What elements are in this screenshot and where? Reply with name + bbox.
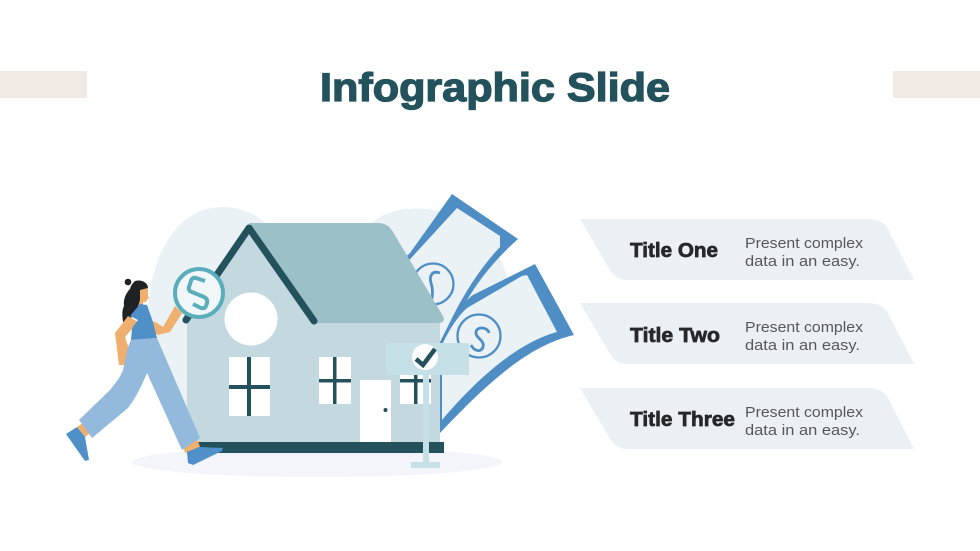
dollar coin [175,269,223,317]
shirt [130,304,157,340]
for sale sign [386,343,469,468]
title: Infographic Slide [320,66,670,110]
background blob right [370,209,508,420]
panel: title three [580,388,914,449]
hair [122,279,148,322]
text: description one: Present complex [745,235,864,252]
text: description one: data in an easy. [745,253,860,270]
heading: title three: Title Three [630,409,735,431]
house roof [249,223,444,323]
right window [400,357,431,404]
front arm [150,306,182,335]
trousers [79,338,200,450]
ground shadow [132,447,502,477]
front banknote [440,264,574,433]
illustration: house, person and money [66,194,574,477]
text: description three: data in an easy. [745,422,860,439]
left shoe [66,427,89,461]
attic round window [224,292,278,346]
right accent bar [893,71,980,98]
background blob left [147,207,290,440]
ankles [77,423,200,453]
person [66,279,223,465]
panel: title two [580,303,914,364]
door [360,380,391,442]
roof edge [186,228,314,321]
heading: title one: Title One [630,240,718,262]
right shoe [187,447,223,465]
back banknote [400,194,518,350]
heading: title two: Title Two [630,325,720,347]
middle window [319,357,351,404]
text: description three: Present complex [745,404,864,421]
panel: title one [580,219,914,280]
back arm [115,316,138,365]
left accent bar [0,71,87,98]
left window [229,357,270,416]
house body [187,232,440,442]
text: description two: data in an easy. [745,337,860,354]
head and neck [138,288,149,307]
house foundation [198,442,444,453]
text: description two: Present complex [745,319,864,336]
